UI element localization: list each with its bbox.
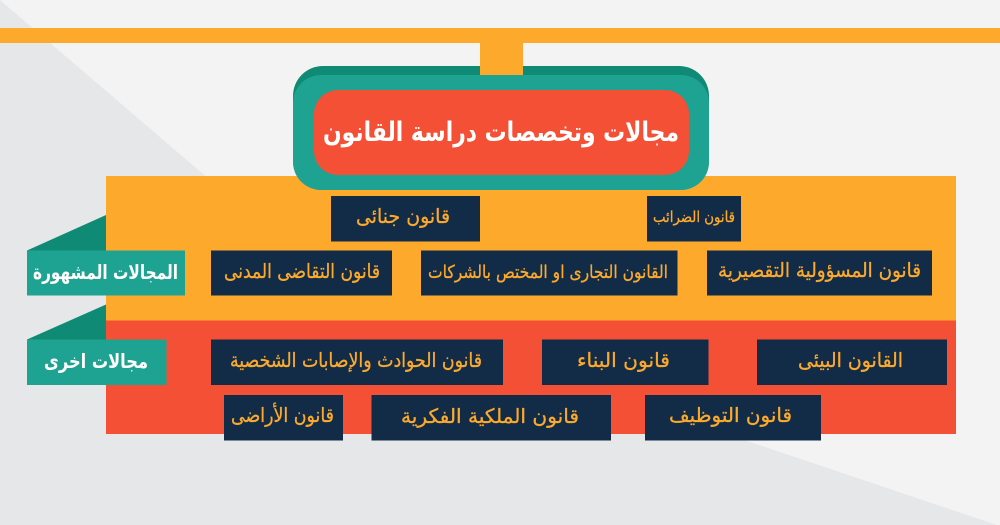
title block — [293, 43, 709, 190]
box: construction law — [542, 340, 708, 385]
box: accident and personal injury law: قانون الحوادث والإصابات الشخصية — [230, 348, 482, 372]
box: intellectual property law: قانون الملكية الفكرية — [401, 404, 579, 428]
box: civil litigation law: قانون التقاضى المدنى — [224, 259, 380, 283]
label: popular fields: المجالات المشهورة — [33, 260, 178, 284]
label: other fields — [27, 304, 166, 385]
label: other fields: مجالات اخرى — [44, 349, 148, 373]
title panel — [314, 90, 689, 175]
title text: مجالات وتخصصات دراسة القانون — [323, 117, 679, 148]
panel: popular fields — [106, 176, 956, 320]
box: land law — [224, 395, 343, 440]
box: employment law — [645, 395, 821, 440]
box: tort law — [707, 250, 932, 296]
box: environmental law — [757, 340, 947, 385]
box: criminal law: قانون جنائى — [356, 204, 450, 228]
connector — [480, 43, 523, 75]
box: tort law: قانون المسؤولية التقصيرية — [718, 258, 921, 282]
box: commercial law — [421, 250, 678, 296]
box: construction law: قانون البناء — [577, 348, 670, 372]
box: intellectual property law — [372, 395, 611, 440]
box: criminal law — [331, 196, 480, 242]
box: tax law: قانون الضرائب — [653, 208, 735, 226]
box: accident and personal injury law — [211, 340, 503, 385]
panel: other fields — [106, 320, 956, 434]
box: civil litigation law — [211, 250, 392, 296]
box: commercial law: القانون التجارى او المختص بالشركات — [428, 262, 668, 283]
box: land law: قانون الأراضى — [231, 403, 334, 427]
top orange bar — [0, 28, 1000, 43]
box: tax law — [647, 196, 741, 242]
label: popular fields — [27, 215, 185, 296]
box: employment law: قانون التوظيف — [669, 403, 792, 427]
box: environmental law: القانون البيئى — [798, 348, 903, 372]
